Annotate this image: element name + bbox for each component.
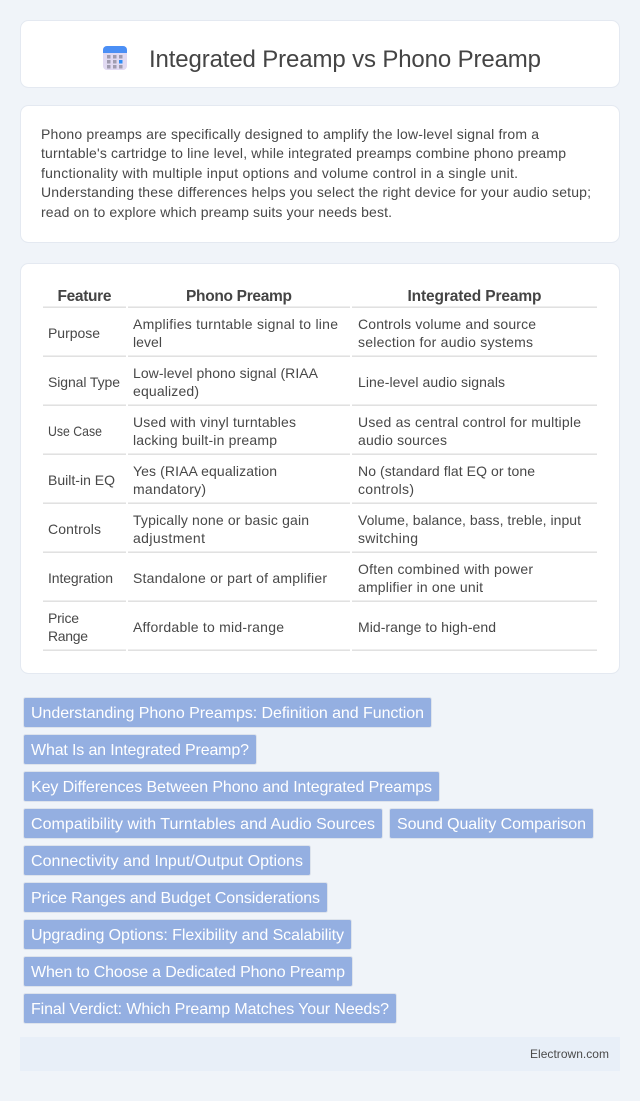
row: use case: audio sources xyxy=(358,432,447,448)
row: price range xyxy=(48,610,496,644)
intro text: Phono preamps are specifically designed to amplify the low-level signal from a xyxy=(41,126,539,142)
row: purpose: Amplifies turntable signal to line xyxy=(133,316,338,332)
row: controls xyxy=(48,512,581,546)
tag: When to Choose a Dedicated Phono Preamp xyxy=(31,964,345,981)
row: controls: Volume, balance, bass, treble, input xyxy=(358,512,581,528)
tag: What Is an Integrated Preamp? xyxy=(31,742,249,759)
tag xyxy=(24,734,256,764)
row: built-in eq: controls) xyxy=(358,481,414,497)
row: integration: Often combined with power xyxy=(358,561,533,577)
row: controls: Typically none or basic gain xyxy=(133,512,309,528)
row: purpose: level xyxy=(133,334,162,350)
row: purpose: Controls volume and source xyxy=(358,316,536,332)
row: integration xyxy=(48,561,533,595)
row: controls: switching xyxy=(358,530,418,546)
row: use case: Used with vinyl turntables xyxy=(133,414,296,430)
row: built-in eq: Yes (RIAA equalization xyxy=(133,463,277,479)
row: purpose: Purpose xyxy=(48,325,100,341)
tag xyxy=(24,882,328,912)
tag: Key Differences Between Phono and Integrated Preamps xyxy=(31,779,432,796)
row: signal type: Low-level phono signal (RIAA xyxy=(133,365,319,381)
tag xyxy=(24,956,352,986)
tag xyxy=(24,994,396,1024)
row: built-in eq: Built-in EQ xyxy=(48,472,115,488)
footer: Electrown.com xyxy=(530,1047,609,1061)
intro panel xyxy=(20,106,620,242)
tag xyxy=(24,772,440,802)
row: integration: Integration xyxy=(48,570,113,586)
row: price range: Price xyxy=(48,610,79,626)
row: built-in eq xyxy=(48,463,535,497)
row: controls: Controls xyxy=(48,521,101,537)
tag xyxy=(24,920,352,950)
title: Integrated Preamp vs Phono Preamp xyxy=(149,46,541,73)
row: price range: Mid-range to high-end xyxy=(358,619,496,635)
row: price range: Range xyxy=(48,628,88,644)
row: signal type: Line-level audio signals xyxy=(358,374,505,390)
tag: Understanding Phono Preamps: Definition and Function xyxy=(31,705,424,722)
tag: Connectivity and Input/Output Options xyxy=(31,853,303,870)
intro text: functionality with multiple input options and volume control in a single unit. xyxy=(41,165,518,181)
tag xyxy=(24,808,382,838)
row: signal type: equalized) xyxy=(133,383,199,399)
footer xyxy=(20,1037,620,1071)
row: signal type xyxy=(48,365,505,399)
intro text: Understanding these differences helps you select the right device for your audio setup; xyxy=(41,184,591,200)
intro text xyxy=(41,126,591,220)
tag xyxy=(24,698,432,728)
row: use case: lacking built-in preamp xyxy=(133,432,277,448)
row: controls: adjustment xyxy=(133,530,205,546)
row: integration: Standalone or part of amplifier xyxy=(133,570,327,586)
table header: Integrated Preamp xyxy=(408,288,542,305)
table header xyxy=(58,288,542,305)
row: built-in eq: mandatory) xyxy=(133,481,206,497)
intro text: turntable's cartridge to line level, while integrated preamps combine phono preamp xyxy=(41,145,566,161)
tag xyxy=(390,808,594,838)
icon: calendar grid xyxy=(103,46,127,70)
tag: Final Verdict: Which Preamp Matches Your Needs? xyxy=(31,1001,389,1018)
row: purpose: selection for audio systems xyxy=(358,334,533,350)
tag: Sound Quality Comparison xyxy=(397,816,586,833)
row: use case: Use Case xyxy=(48,423,102,439)
row: purpose xyxy=(48,316,536,350)
table header: Phono Preamp xyxy=(186,288,292,305)
row: built-in eq: No (standard flat EQ or tone xyxy=(358,463,535,479)
comparison table panel xyxy=(20,264,620,674)
tag: Price Ranges and Budget Considerations xyxy=(31,890,320,907)
row: signal type: Signal Type xyxy=(48,374,120,390)
table header: Feature xyxy=(58,288,112,305)
intro text: read on to explore which preamp suits your needs best. xyxy=(41,204,392,220)
row: use case: Used as central control for multiple xyxy=(358,414,581,430)
topic tags xyxy=(24,698,594,1024)
row: use case xyxy=(48,414,581,448)
row: price range: Affordable to mid-range xyxy=(133,619,284,635)
tag: Compatibility with Turntables and Audio Sources xyxy=(31,816,375,833)
tag xyxy=(24,846,310,876)
tag: Upgrading Options: Flexibility and Scalability xyxy=(31,927,344,944)
row: integration: amplifier in one unit xyxy=(358,579,483,595)
header panel xyxy=(20,20,620,88)
